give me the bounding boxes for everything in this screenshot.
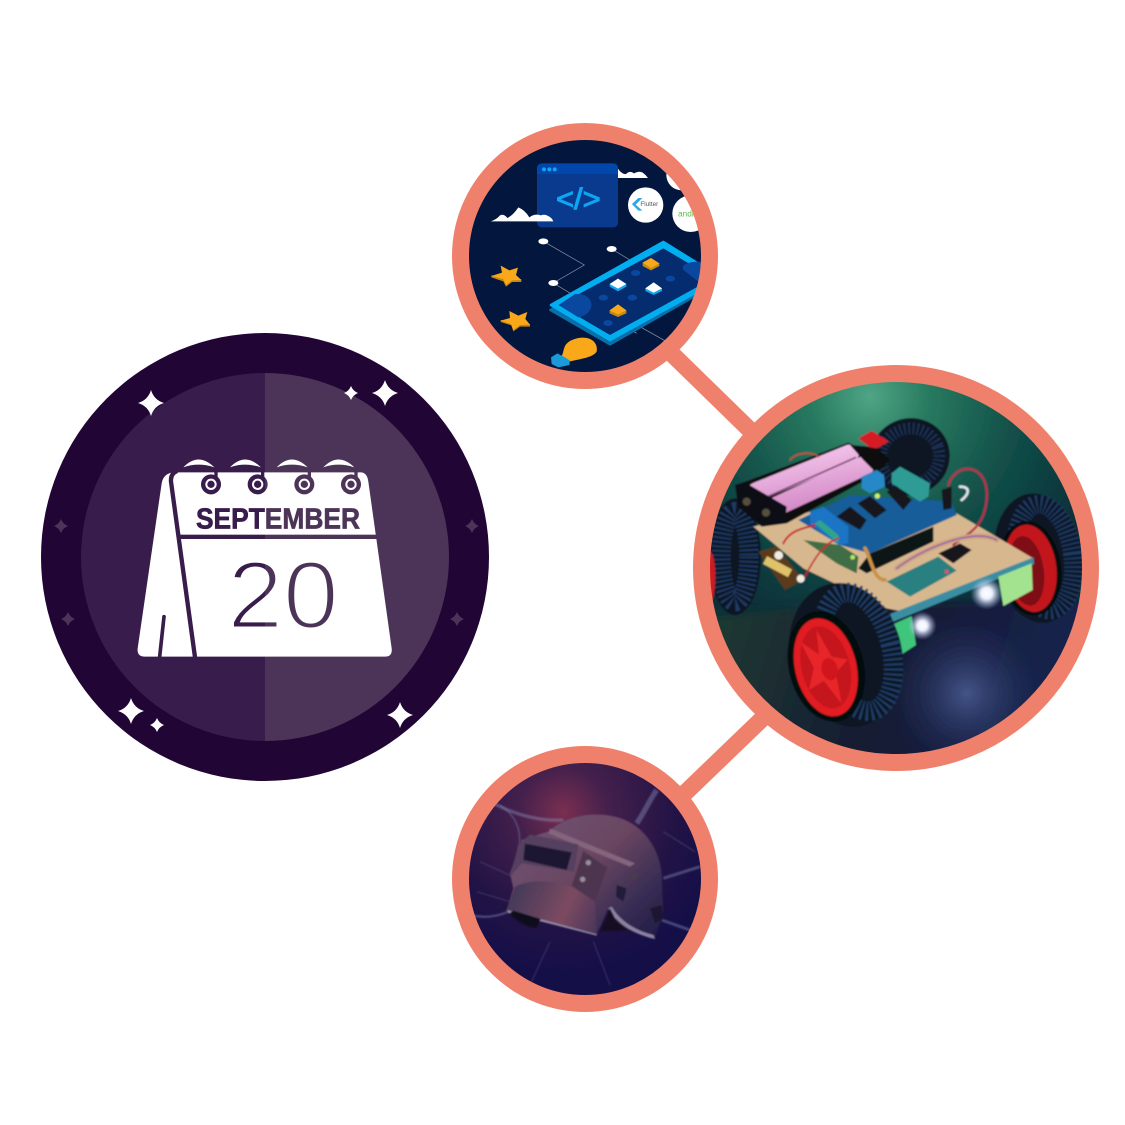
connector: robot circle to helmet circle xyxy=(684,717,764,794)
logo: Flutter badge xyxy=(628,187,663,223)
decorative sparkles on badge xyxy=(54,380,479,732)
logo: white badge at top right xyxy=(666,174,681,190)
robot: LED headlights xyxy=(908,577,1003,640)
robot: wires xyxy=(783,453,997,580)
logo: Flutter badge: Flutter xyxy=(640,201,658,208)
robot: rear right wheel xyxy=(876,417,950,496)
photo backdrop xyxy=(712,382,1082,754)
illustration: smartphone xyxy=(550,242,722,345)
robot: right wheel xyxy=(994,493,1082,623)
photo circle: app development illustration xyxy=(460,130,722,380)
robot: bluetooth module xyxy=(887,543,972,597)
badge: calendar date xyxy=(41,333,489,781)
robot: far left wheel xyxy=(705,498,761,615)
logo: Android badge: andr xyxy=(678,208,695,218)
calendar day number: 20 xyxy=(227,542,339,649)
cobweb strands xyxy=(470,790,700,985)
helmet xyxy=(507,814,663,939)
icon: desk calendar xyxy=(138,459,392,657)
illustration: code window xyxy=(491,163,618,227)
illustration: lightbulb xyxy=(551,338,597,367)
illustration: clouds xyxy=(618,168,648,178)
robot: front bumpers xyxy=(892,563,1033,655)
illustration: node lines xyxy=(543,241,667,342)
robot: motor driver shield and chips xyxy=(798,467,957,573)
illustration: code window: </> xyxy=(556,183,601,216)
photo circle: robot car xyxy=(690,360,1105,793)
robot: battery pack xyxy=(735,431,890,527)
calendar month label: SEPTEMBER xyxy=(196,504,360,536)
helmet backdrop xyxy=(469,763,701,995)
robot: front wheel xyxy=(787,582,904,726)
logo: Android badge xyxy=(672,196,698,232)
illustration: stars xyxy=(491,266,530,331)
connector: top circle to robot circle xyxy=(672,354,752,432)
photo circle: game helmet xyxy=(450,745,720,1015)
robot: wooden chassis xyxy=(753,507,1034,622)
illustration: node dots xyxy=(538,238,617,286)
